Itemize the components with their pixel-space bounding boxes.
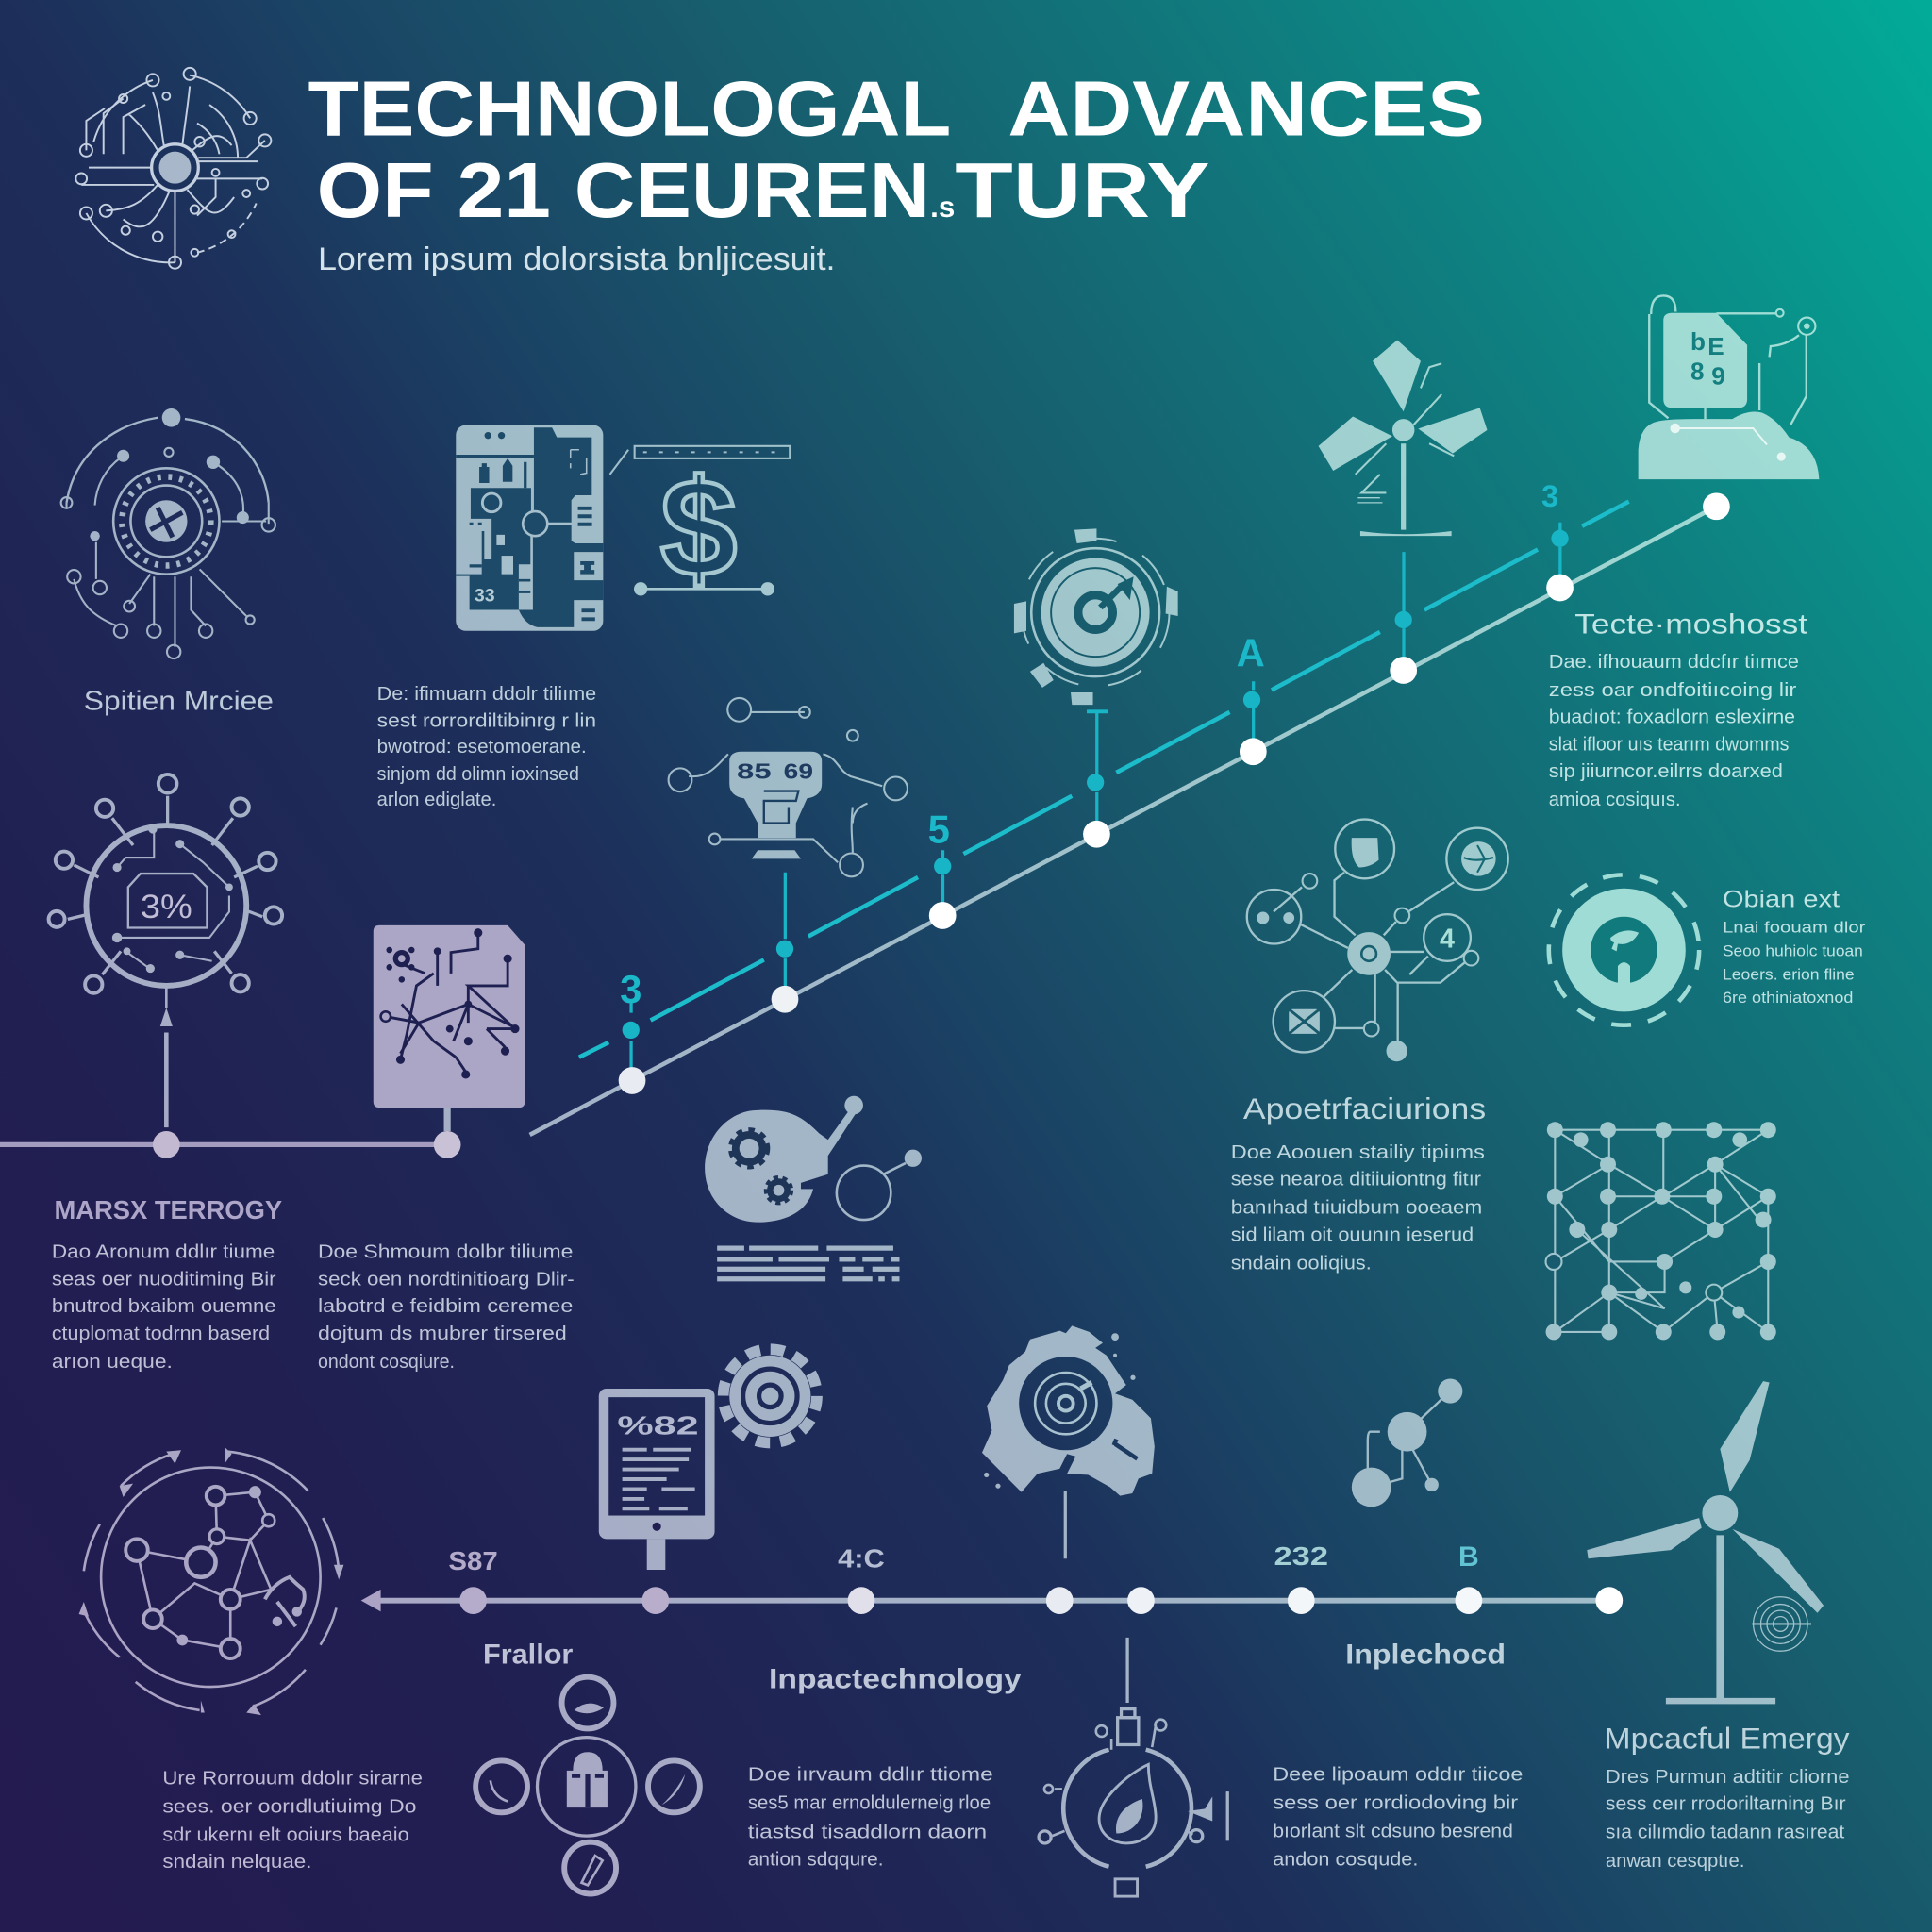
step labels: 3 (620, 967, 641, 1011)
text block: bottom left: sees. oer oorıdlutiuimg Do (162, 1796, 416, 1817)
text block: bottom right (1606, 1767, 1849, 1872)
text block: Marsx left: ctuplomat todrnn baserd (52, 1324, 270, 1344)
title: TECHNOLOGAL (308, 67, 951, 153)
title: ADVANCES (1008, 67, 1485, 153)
text block: Obian ext (1723, 887, 1866, 1007)
heading: Inplechocd: Inplechocd (1345, 1639, 1506, 1670)
text block: bottom right: anwan cesqptıe. (1606, 1851, 1744, 1872)
text block: Tecte-moshosst: amioa cosiquıs. (1549, 790, 1681, 810)
text block: bottom right: Dres Purmun adtitir cliorne (1606, 1767, 1849, 1788)
icon: small wind turbine (1319, 340, 1487, 536)
subtitle: Lorem ipsum dolorsista bnljicesuit. (318, 242, 836, 277)
text block: Tecte-moshosst: sip jiiurncor.eilrrs doarxed (1549, 761, 1783, 782)
text block: upper middle: De: ifimuarn ddolr tiliıme (377, 684, 596, 705)
cyan stems and dots (623, 523, 1569, 1080)
text block: Obian ext: Seoo huhiolc tuoan (1723, 942, 1863, 960)
icon: gears blob (705, 1096, 922, 1223)
text block: bottom left: sdr ukernı elt ooiurs baeaio (162, 1824, 409, 1845)
text block: upper middle: sinjom dd olimn ioxinsed (377, 764, 579, 785)
icon: dashed ring leaf badge (1549, 874, 1699, 1025)
icon: 3% processor: 3% (141, 889, 192, 925)
heading: Spitien Mrciee: Spitien Mrciee (84, 686, 274, 716)
text block: bottom third: sess oer rordiodoving bir (1273, 1792, 1518, 1813)
text block: Apoetrfaciurions: Doe Aoouen stailiy tipiıms (1231, 1142, 1485, 1163)
timeline labels: 4:C (838, 1543, 885, 1573)
text block: Marsx left (52, 1242, 276, 1373)
icon: 3% processor (49, 774, 282, 993)
text block: bottom third: Deee lipoaum oddır tiicoe (1273, 1764, 1523, 1785)
icon: robot head circuit: 69 (784, 758, 813, 783)
text block: bottom second: ses5 mar ernoldulerneig rloe (748, 1792, 991, 1813)
text block: bottom second: Doe iırvaum ddlır ttiome (748, 1764, 993, 1785)
icon: network document (374, 925, 525, 1108)
icon: tablet and gear (599, 1349, 817, 1570)
text block: upper middle: bwotrod: esetomoerane. (377, 737, 587, 758)
text block: Obian ext: Lnai foouam dlor (1723, 919, 1866, 937)
text block: bottom third: andon cosqude. (1273, 1849, 1418, 1870)
icon: node network hub (1247, 820, 1508, 1061)
icon: drop in gear ring (1039, 1638, 1229, 1896)
icon: circular processor (61, 408, 275, 658)
icon: computer chip on cloud (1639, 295, 1819, 479)
text block: Obian ext: Obian ext (1723, 887, 1840, 912)
step labels: A (1237, 631, 1265, 675)
text block: Marsx right: labotrd e feidbim ceremee (318, 1296, 573, 1317)
text block: Marsx right: Doe Shmoum dolbr tiliume (318, 1242, 573, 1263)
bars: text placeholder (717, 1245, 899, 1281)
icon: computer chip on cloud: 8 (1690, 357, 1705, 385)
icon: computer chip on cloud: 9 (1711, 362, 1725, 391)
text block: Tecte-moshosst: buadıot: foxadlorn eslexirne (1549, 708, 1795, 728)
text block: bottom third: bıorlant slt cdsuno besrend (1273, 1821, 1513, 1841)
text block: Apoetrfaciurions: sese nearoa ditiiuiontng fitır (1231, 1169, 1481, 1190)
connector from processor to track (0, 989, 460, 1158)
title: OF 21 CEUREN (317, 148, 930, 234)
icon: phone circuit with dollar: 33 (475, 585, 495, 606)
text block: bottom left: sndain nelquae. (162, 1852, 311, 1873)
heading: Frallor: Frallor (483, 1639, 574, 1670)
text block: Apoetrfaciurions: sid lilam oit ouunın ieserud (1231, 1224, 1474, 1245)
text block: bottom left (162, 1768, 423, 1873)
icon: flower of app circles (475, 1677, 700, 1894)
icon: target gear (1014, 528, 1178, 705)
icon: phone circuit with dollar (456, 425, 790, 631)
icon: phone circuit with dollar: $ (660, 451, 737, 605)
icon: lattice network (1546, 1122, 1776, 1340)
timeline labels: B (1458, 1541, 1479, 1573)
text block: Marsx left: seas oer nuoditiming Bir (52, 1269, 276, 1290)
text block: Marsx right: dojtum ds mubrer tirsered (318, 1324, 567, 1344)
timeline labels: S87 (448, 1546, 498, 1575)
step labels (620, 478, 1558, 1011)
text block: Obian ext: 6re othiniatoxnod (1723, 989, 1853, 1007)
timeline labels: 232 (1274, 1541, 1328, 1571)
text block: Tecte-moshosst: slat ifloor uıs tearım dwomms (1549, 734, 1789, 755)
icon: robot head circuit (669, 698, 908, 876)
text block: Apoetrfaciurions: sndain ooliqius. (1231, 1253, 1372, 1274)
text block: Apoetrfaciurions: banıhad tıiuidbum ooeaem (1231, 1198, 1482, 1219)
icon: tablet and gear: %82 (617, 1410, 699, 1440)
title (308, 67, 1485, 234)
heading: Inpactechnology: Inpactechnology (769, 1663, 1022, 1694)
icon: small molecule nodes (1352, 1379, 1462, 1507)
text block: Apoetrfaciurions (1231, 1092, 1486, 1274)
bottom timeline (361, 1587, 1623, 1614)
text block: Tecte-moshosst: Dae. ifhouaum ddcfır tiımce (1549, 652, 1799, 673)
title: .s (930, 191, 955, 224)
text block: upper middle (377, 684, 596, 810)
text block: upper middle: arlon ediglate. (377, 790, 496, 810)
icon: circular network with arrows (79, 1448, 343, 1715)
icon: computer chip on cloud: b (1690, 327, 1706, 356)
icon: robot head circuit: 85 (737, 758, 772, 783)
timeline labels (448, 1541, 1479, 1575)
text block: Marsx right: ondont cosqiure. (318, 1352, 455, 1373)
text block: Apoetrfaciurions: Apoetrfaciurions (1243, 1092, 1486, 1125)
step labels: 3 (1541, 478, 1558, 513)
text block: bottom second: tiastsd tisaddlorn daorn (748, 1823, 987, 1843)
white nodes (619, 492, 1730, 1094)
text block: Marsx left: bnutrod bxaibm ouemne (52, 1296, 276, 1317)
icon: node network hub: 4 (1440, 924, 1455, 954)
text block: bottom second: antion sdqqure. (748, 1849, 883, 1870)
text block: Tecte-moshosst (1549, 608, 1808, 810)
text block: Marsx left: arıon ueque. (52, 1352, 173, 1373)
text block: Marsx right (318, 1242, 575, 1373)
text block: upper middle: sest rorrordiltibinrg r lin (377, 711, 596, 732)
icon: circuit globe (75, 68, 271, 269)
ascending timeline (530, 478, 1730, 1135)
text block: Tecte-moshosst: zess oar ondfoitiıcoing lir (1549, 680, 1797, 701)
icon: large wind turbine (1587, 1381, 1824, 1704)
text block: bottom second (748, 1764, 993, 1870)
title: TURY (955, 148, 1210, 234)
text block: bottom left: Ure Rorrouum ddolır sirarne (162, 1768, 423, 1789)
icon: gear blob with target (982, 1325, 1155, 1558)
text block: bottom right: sess ceır rrodoriltarning Bır (1606, 1794, 1846, 1815)
text block: bottom third (1273, 1764, 1523, 1870)
cyan dashed track (579, 502, 1629, 1058)
text block: Marsx right: seck oen nordtinitioarg Dlir- (318, 1269, 575, 1290)
heading: MARSX TERROGY: MARSX TERROGY (54, 1195, 282, 1224)
text block: Obian ext: Leoers. erion fline (1723, 965, 1855, 983)
text block: bottom right: sıa cilımdio tadann rasıreat (1606, 1823, 1845, 1843)
step labels: 5 (928, 807, 950, 851)
text block: Tecte-moshosst: Tecte·moshosst (1574, 608, 1808, 640)
icon: computer chip on cloud: E (1707, 332, 1724, 360)
heading: Mpcacful Emergy: Mpcacful Emergy (1605, 1722, 1850, 1755)
text block: Marsx left: Dao Aronum ddlır tiume (52, 1242, 275, 1263)
